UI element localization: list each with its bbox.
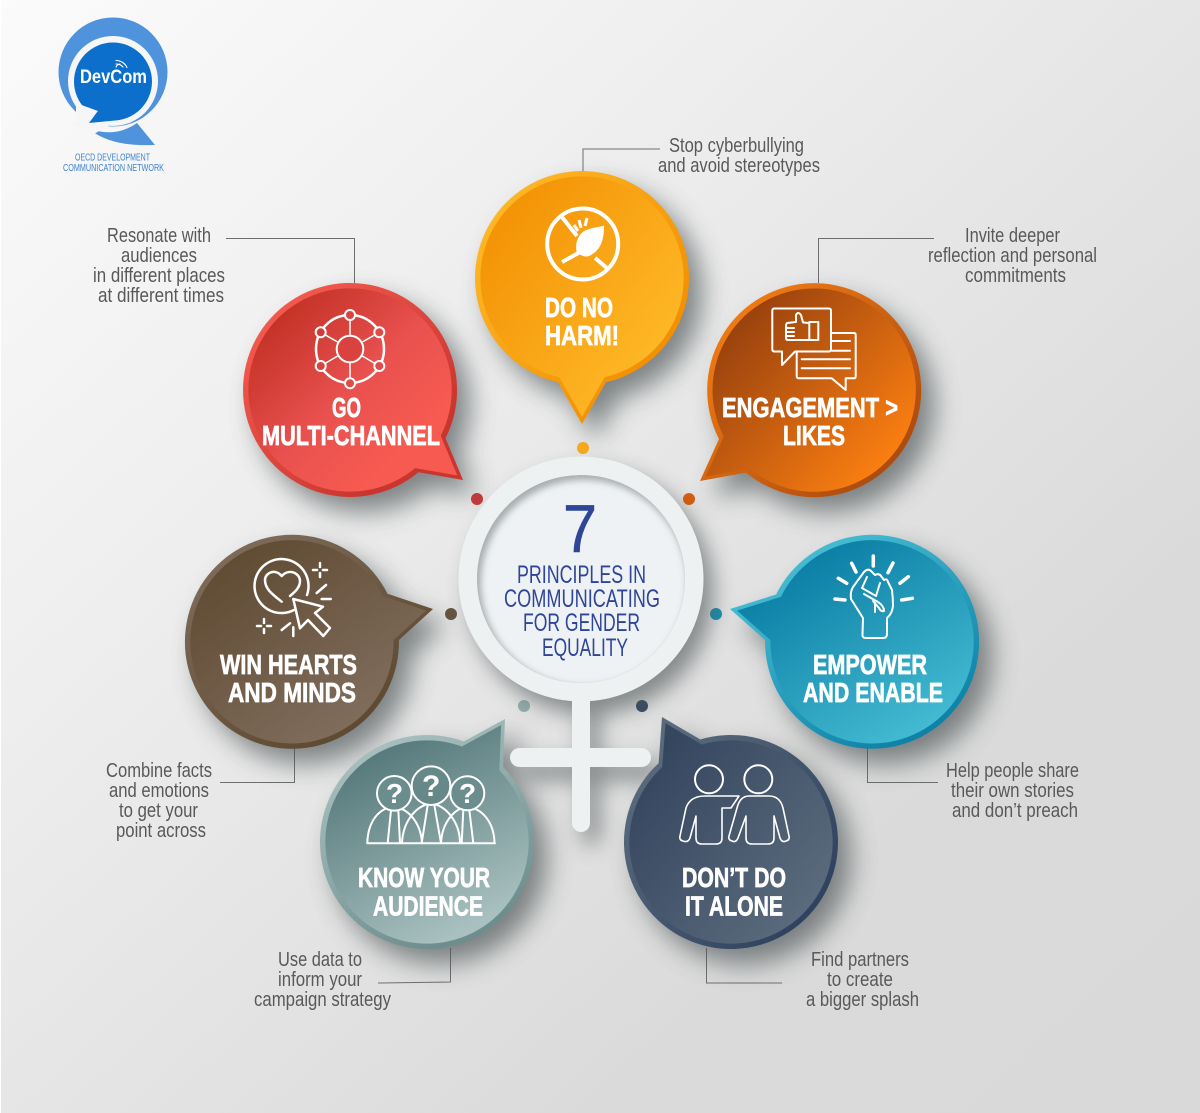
panel: empower and enable (730, 535, 979, 749)
icon: network (316, 310, 384, 388)
heading (545, 292, 619, 351)
callout: engagement: reflection and personal (928, 244, 1097, 267)
icon: audience with question marks: ? (422, 770, 440, 803)
callout: do no harm (658, 134, 820, 177)
panel: do no harm (475, 171, 689, 424)
center numeral 7: 7 (563, 491, 597, 567)
callout: win hearts (106, 759, 212, 842)
heading (262, 392, 440, 451)
callout: win hearts: Combine facts (106, 759, 212, 782)
panel: know your audience (320, 719, 534, 949)
callout: empower (946, 759, 1079, 822)
icon: audience with question marks: ? (459, 778, 476, 809)
callout: multi-channel: at different times (98, 284, 224, 307)
panel: go multi-channel (243, 283, 463, 497)
icon: two people (680, 765, 789, 844)
heading: ENGAGEMENT > (722, 392, 898, 423)
callout leader lines (220, 149, 938, 983)
callout: do no harm: and avoid stereotypes (658, 154, 820, 177)
heading: GO (332, 392, 361, 423)
callout: engagement (928, 224, 1097, 287)
heading: IT ALONE (685, 890, 783, 922)
panel: don't do it alone (624, 717, 838, 949)
logo: DevCom: COMMUNICATION NETWORK (63, 162, 164, 174)
logo: DevCom: OECD DEVELOPMENT (75, 152, 150, 164)
callout: don't do it alone: a bigger splash (806, 988, 919, 1011)
center title: FOR GENDER (523, 609, 640, 637)
heading: MULTI-CHANNEL (262, 420, 440, 451)
heading (722, 392, 898, 451)
heading: DON’T DO (682, 862, 786, 893)
heading: WIN HEARTS (220, 649, 357, 680)
center title (504, 561, 660, 662)
center title: EQUALITY (542, 634, 628, 662)
callout: empower: and don’t preach (952, 799, 1078, 822)
heading: EMPOWER (813, 649, 927, 680)
connector dots (445, 442, 722, 712)
callout: don't do it alone: to create (827, 968, 893, 991)
heading: DO NO (545, 292, 613, 323)
icon: speech bubbles with thumb up (772, 308, 856, 390)
icon: audience with question marks: ? (386, 778, 403, 809)
heading: AUDIENCE (373, 890, 483, 922)
icon: heart with cursor (255, 559, 331, 636)
callout: don't do it alone: Find partners (811, 948, 909, 971)
callout: multi-channel: audiences (121, 244, 197, 267)
icon: crossed-out leaf (547, 208, 618, 280)
callout: engagement: commitments (965, 264, 1066, 287)
callout: know your audience: Use data to (278, 948, 362, 971)
callout: don't do it alone (806, 948, 919, 1011)
icon: audience with question marks (367, 766, 495, 843)
heading (803, 649, 943, 708)
heading: KNOW YOUR (358, 862, 490, 893)
callout: engagement: Invite deeper (965, 224, 1060, 247)
callout: multi-channel: in different places (93, 264, 225, 287)
center title: PRINCIPLES IN (517, 561, 646, 589)
heading: LIKES (783, 420, 845, 451)
bubble drop shadows (198, 186, 992, 964)
logo: DevCom: DevCom (80, 66, 147, 88)
callout: win hearts: and emotions (109, 779, 209, 802)
panel: win hearts and minds (185, 535, 433, 749)
callout: win hearts: point across (116, 819, 206, 842)
logo: DevCom (58, 18, 168, 174)
callout: know your audience: inform your (278, 968, 362, 991)
callout: win hearts: to get your (119, 799, 198, 822)
callout: know your audience (254, 948, 392, 1011)
callout: know your audience: campaign strategy (254, 988, 392, 1011)
panel: engagement > likes (700, 283, 921, 497)
center title: COMMUNICATING (504, 585, 660, 613)
center venus symbol (458, 456, 714, 845)
callout: multi-channel (93, 224, 225, 307)
callout: do no harm: Stop cyberbullying (669, 134, 804, 157)
icon: raised fist (835, 556, 912, 638)
heading: AND MINDS (228, 677, 356, 708)
callout: empower: their own stories (951, 779, 1074, 802)
callout: multi-channel: Resonate with (107, 224, 211, 247)
heading (358, 862, 490, 922)
callout: empower: Help people share (946, 759, 1079, 782)
heading: AND ENABLE (803, 677, 943, 708)
heading (682, 862, 786, 922)
heading (220, 649, 357, 708)
heading: HARM! (545, 320, 619, 351)
